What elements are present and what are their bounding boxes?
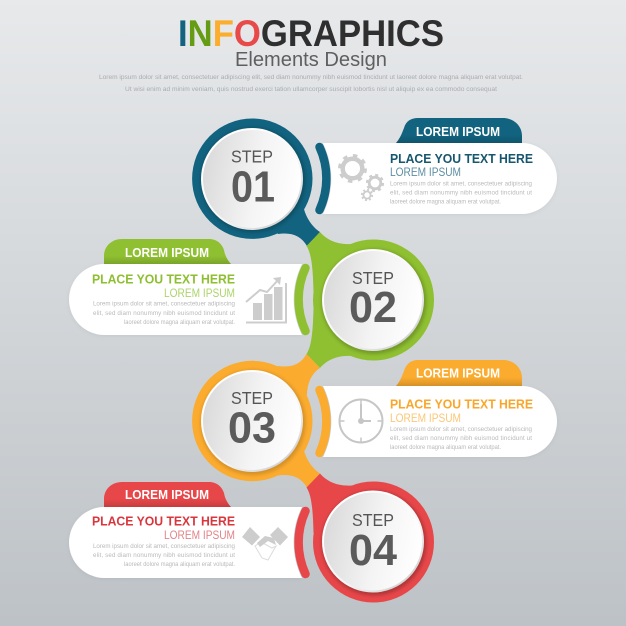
intro text: Ut wisi enim ad minim veniam, quis nostrud exerci tation ullamcorper suscipit lobortis nisl ut aliquip ex ea commodo consequat	[125, 86, 497, 93]
body text	[93, 300, 236, 326]
icon: clock	[340, 400, 382, 442]
ring	[313, 482, 434, 602]
timeline connectors	[262, 209, 352, 541]
panel: step 2 card	[69, 239, 306, 335]
title block	[99, 13, 523, 93]
icon: handshake	[242, 527, 288, 560]
body text	[390, 180, 533, 206]
body text: Lorem ipsum dolor sit amet, consectetuer adipiscing	[93, 543, 236, 550]
step 2	[313, 240, 434, 360]
connector: step 4 neck	[306, 474, 352, 541]
body text	[390, 426, 533, 451]
panel: step 3 card	[320, 360, 557, 457]
tab	[104, 239, 232, 265]
body text: Lorem ipsum dolor sit amet, consectetuer adipiscing	[93, 300, 236, 308]
heading: PLACE YOU TEXT HERE	[390, 151, 533, 166]
ring	[192, 361, 312, 481]
ring	[192, 118, 312, 239]
tab label: LOREM IPSUM	[125, 487, 209, 502]
accent arc	[320, 147, 326, 210]
subheading: LOREM IPSUM	[164, 529, 235, 542]
step number: 04	[349, 526, 398, 575]
accent arc	[299, 268, 306, 331]
step label: STEP	[352, 510, 394, 530]
title: INFOGRAPHICS	[178, 13, 444, 54]
card body	[323, 386, 557, 457]
body text: laoreet dolore magna aliquam erat volutpat.	[390, 198, 501, 206]
body text: Lorem ipsum dolor sit amet, consectetuer adipiscing	[390, 426, 533, 433]
disc	[323, 250, 423, 350]
accent arc	[299, 511, 306, 574]
connector: step 2 upper neck	[306, 232, 352, 300]
card body	[69, 264, 302, 335]
body text: laoreet dolore magna aliquam erat volutpat.	[390, 444, 501, 451]
body text: elit, sed diam nonummy nibh euismod tincidunt ut	[93, 310, 235, 317]
panel: step 1 card	[320, 118, 557, 214]
step number: 02	[349, 283, 397, 332]
body text: elit, sed diam nonummy nibh euismod tincidunt ut	[390, 435, 532, 442]
body text: Lorem ipsum dolor sit amet, consectetuer adipiscing	[390, 180, 533, 188]
subtitle: Elements Design	[235, 48, 387, 71]
tab label: LOREM IPSUM	[416, 366, 500, 381]
subheading: LOREM IPSUM	[390, 412, 461, 425]
body text: elit, sed diam nonummy nibh euismod tincidunt ut	[390, 190, 532, 196]
connector: step 1 neck	[262, 209, 320, 246]
step label: STEP	[231, 147, 273, 167]
connector: step 3 upper neck	[262, 354, 320, 395]
connector: step 3 lower neck	[262, 450, 320, 488]
tab label: LOREM IPSUM	[125, 245, 209, 260]
heading: PLACE YOU TEXT HERE	[92, 514, 235, 529]
tab	[395, 118, 522, 144]
step number: 01	[231, 162, 275, 212]
step 3	[192, 361, 312, 481]
tab label: LOREM IPSUM	[416, 124, 500, 139]
tab	[395, 360, 522, 387]
icon: bar chart with arrow	[246, 277, 286, 322]
card body	[323, 143, 557, 214]
step number: 03	[228, 404, 276, 452]
intro text	[99, 74, 523, 93]
step label: STEP	[231, 388, 273, 408]
step 1	[192, 118, 312, 239]
ring	[313, 240, 434, 360]
disc	[202, 371, 302, 471]
step label: STEP	[352, 268, 394, 288]
panel: step 4 card	[69, 482, 306, 578]
accent arc	[320, 390, 326, 453]
body text: laoreet dolore magna aliquam erat volutpat.	[124, 561, 235, 568]
disc	[202, 129, 302, 229]
subheading: LOREM IPSUM	[390, 166, 461, 179]
body text	[93, 543, 236, 568]
disc	[323, 492, 423, 592]
subheading: LOREM IPSUM	[164, 287, 235, 300]
body text: elit, sed diam nonummy nibh euismod tincidunt ut	[93, 552, 235, 559]
intro text: Lorem ipsum dolor sit amet, consectetuer adipiscing elit, sed diam nonummy nibh euismod tincidunt ut laoreet dolore magna aliquam erat volutpat.	[99, 74, 523, 81]
card body	[69, 507, 302, 578]
tab	[104, 482, 232, 508]
step 4	[313, 482, 434, 602]
body text: laoreet dolore magna aliquam erat volutpat.	[124, 319, 235, 326]
connector: step 2 lower neck	[306, 300, 352, 368]
heading: PLACE YOU TEXT HERE	[92, 272, 235, 286]
heading: PLACE YOU TEXT HERE	[390, 396, 533, 411]
icon: gears	[340, 156, 383, 200]
